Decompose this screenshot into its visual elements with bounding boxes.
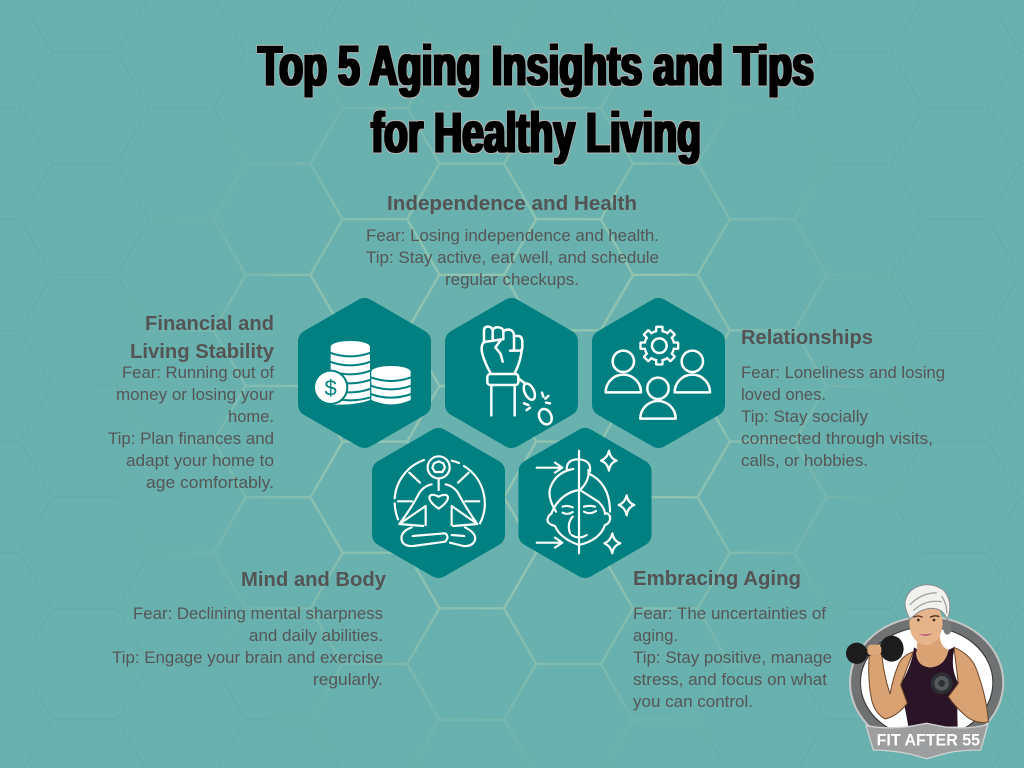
text block: financial and living stability: adapt your home to xyxy=(126,451,274,470)
text block: mind and body: Fear: Declining mental sharpness xyxy=(133,604,383,623)
heading: relationships: Relationships xyxy=(741,327,873,349)
text block: financial and living stability: Fear: Running out of xyxy=(122,363,274,382)
icon: fit after 55 mascot logo xyxy=(846,585,1003,759)
text block: financial and living stability: money or losing your xyxy=(116,385,274,404)
text block: embracing aging: stress, and focus on what xyxy=(633,670,827,689)
text block: independence and health: Tip: Stay active, eat well, and schedule xyxy=(366,248,659,267)
text block: financial and living stability xyxy=(108,363,274,492)
text block: relationships: Fear: Loneliness and losing xyxy=(741,363,945,382)
text block: relationships xyxy=(741,363,945,470)
face xyxy=(909,601,943,645)
text block: relationships: loved ones. xyxy=(741,385,826,404)
banner text: FIT AFTER 55 xyxy=(877,730,980,749)
text block: financial and living stability: home. xyxy=(228,407,274,426)
panel: mind and body text xyxy=(112,569,387,689)
panel: independence and health text xyxy=(366,193,659,289)
raised dumbbell xyxy=(863,646,887,657)
panel: hexagon independence xyxy=(457,310,566,436)
text block: financial and living stability: Tip: Plan finances and xyxy=(108,429,274,448)
title: for Healthy Living xyxy=(371,101,701,165)
text block: embracing aging: aging. xyxy=(633,626,678,645)
left arm xyxy=(869,652,913,719)
panel: hexagon mind and body xyxy=(384,440,493,566)
heading: financial and living stability: Living Stability xyxy=(130,341,275,363)
text block: embracing aging: Fear: The uncertainties of xyxy=(633,604,826,623)
panel: hexagon embracing aging xyxy=(530,440,640,566)
banner xyxy=(866,723,988,759)
text block: mind and body: Tip: Engage your brain and exercise xyxy=(112,648,383,667)
title xyxy=(258,34,814,165)
lower dumbbell xyxy=(931,672,953,694)
text block: embracing aging: you can control. xyxy=(633,692,753,711)
icon: stacked coins: $ xyxy=(325,375,337,400)
panel: embracing aging text xyxy=(633,568,832,711)
text block: embracing aging: Tip: Stay positive, manage xyxy=(633,648,832,667)
panel: relationships text xyxy=(741,327,945,470)
heading: embracing aging: Embracing Aging xyxy=(633,568,801,590)
ring xyxy=(850,617,1003,749)
panel: hexagon relationships xyxy=(604,310,713,436)
icon: stacked coins xyxy=(313,341,411,405)
text block: independence and health: Fear: Losing independence and health. xyxy=(366,226,659,245)
icon: aging face xyxy=(537,451,634,553)
heading: mind and body: Mind and Body xyxy=(241,569,387,591)
panel: hexagon financial xyxy=(310,310,419,436)
heading: financial and living stability: Financial and xyxy=(145,313,274,335)
text block: independence and health xyxy=(366,226,659,289)
hair xyxy=(905,585,950,619)
text block: mind and body xyxy=(112,604,383,689)
icon: meditating figure xyxy=(395,456,485,546)
text block: relationships: Tip: Stay socially xyxy=(741,407,868,426)
text block: relationships: connected through visits, xyxy=(741,429,933,448)
heading: financial and living stability xyxy=(130,313,275,363)
right arm xyxy=(948,647,988,723)
tank top xyxy=(900,647,958,727)
icon: fist breaking chain xyxy=(482,327,554,426)
chest and neck xyxy=(916,632,949,667)
text block: mind and body: regularly. xyxy=(313,670,383,689)
panel: financial and living stability text xyxy=(108,313,275,492)
text block: financial and living stability: age comfortably. xyxy=(146,473,274,492)
icon: people and gear xyxy=(606,326,710,419)
heading: independence and health: Independence and Health xyxy=(387,193,637,215)
text block: embracing aging xyxy=(633,604,832,711)
text block: relationships: calls, or hobbies. xyxy=(741,451,868,470)
text block: independence and health: regular checkups. xyxy=(445,270,579,289)
text block: mind and body: and daily abilities. xyxy=(249,626,383,645)
